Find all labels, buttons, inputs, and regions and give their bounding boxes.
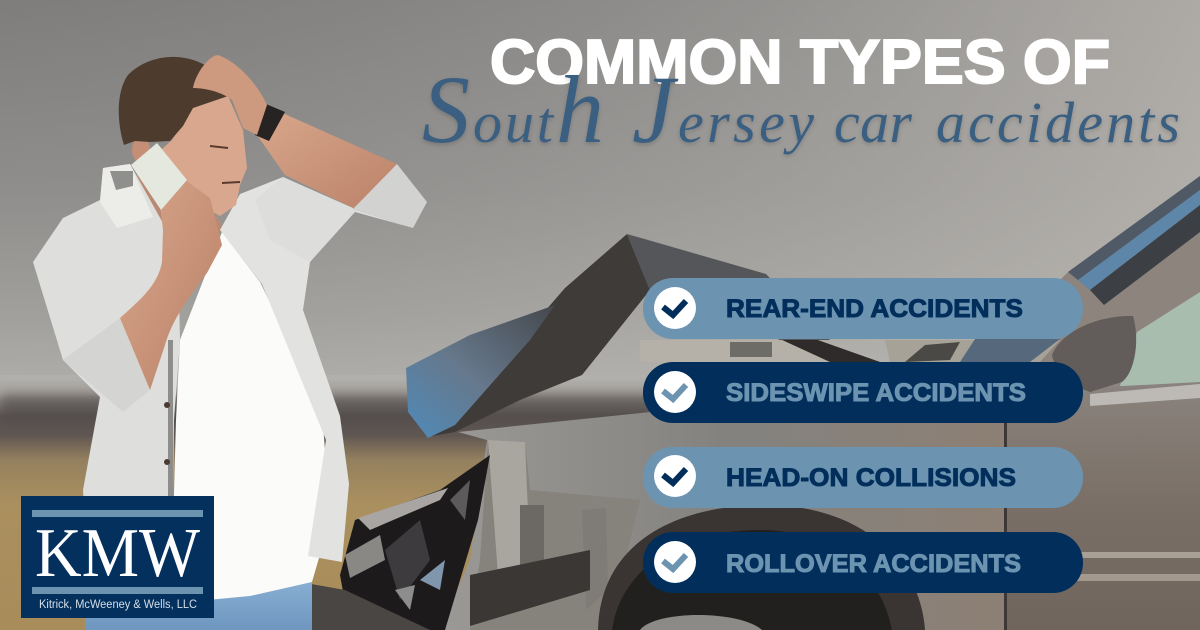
car: door and body panel: [1004, 382, 1200, 630]
man: wristwatch: [255, 104, 285, 141]
list item: rollover accidents: [643, 532, 1083, 593]
car: bent hood underside: [432, 234, 650, 436]
script subtitle: [422, 56, 1180, 163]
car: bent hood outer skin: [406, 305, 555, 438]
man on phone: [33, 55, 427, 630]
list of accident types: [643, 278, 1083, 593]
car: engine bay above fender: [640, 339, 1060, 362]
man: jeans: [85, 582, 312, 630]
man: face: [150, 96, 247, 216]
man: hand on head: [193, 55, 267, 135]
list item: sideswipe accidents: [643, 362, 1083, 423]
list item: rear-end accidents: [643, 278, 1083, 339]
car: window pillar and roof: [1040, 176, 1200, 400]
man: neck: [125, 175, 225, 260]
car: front panel: [470, 440, 640, 630]
car: wheel arch and tyre: [598, 505, 925, 630]
logo: KMW: Kitrick, McWeeney & Wells, LLC: [39, 599, 197, 611]
car: bumper: [300, 582, 430, 630]
man: phone: [131, 143, 187, 210]
man: left shirt panel and sleeve: [33, 164, 186, 602]
car: body base: [440, 385, 1010, 630]
man: ear: [132, 137, 150, 163]
list item: head-on collisions: HEAD-ON COLLISIONS: [726, 464, 1016, 492]
title: COMMON TYPES OF: [490, 28, 1110, 97]
script subtitle: South: [422, 56, 604, 163]
list item: rollover accidents: ROLLOVER ACCIDENTS: [726, 550, 1021, 578]
car: crushed engine and headlight: [340, 455, 490, 630]
man: eyes and mouth: [210, 146, 240, 183]
logo: KMW: KMW: [35, 515, 200, 592]
man: rolled right sleeve: [255, 177, 413, 262]
car: hood flange: [627, 234, 830, 340]
script subtitle: car: [834, 90, 912, 155]
list item: head-on collisions: [643, 447, 1083, 508]
man: raised forearm: [257, 105, 412, 208]
man: forearm and phone hand: [120, 168, 222, 390]
script subtitle: Jersey: [632, 56, 814, 163]
man: open shirt, right panel: [220, 177, 353, 562]
wrecked car: [300, 176, 1200, 630]
man: rolled left sleeve cuff: [63, 318, 150, 412]
logo: KMW: [21, 496, 214, 618]
list item: sideswipe accidents: SIDESWIPE ACCIDENTS: [726, 379, 1026, 407]
man: white t-shirt: [172, 232, 330, 602]
man: hair: [119, 57, 228, 145]
script subtitle: accidents: [936, 90, 1180, 155]
car: side mirror: [1052, 316, 1136, 392]
list item: rear-end accidents: REAR-END ACCIDENTS: [726, 295, 1023, 323]
